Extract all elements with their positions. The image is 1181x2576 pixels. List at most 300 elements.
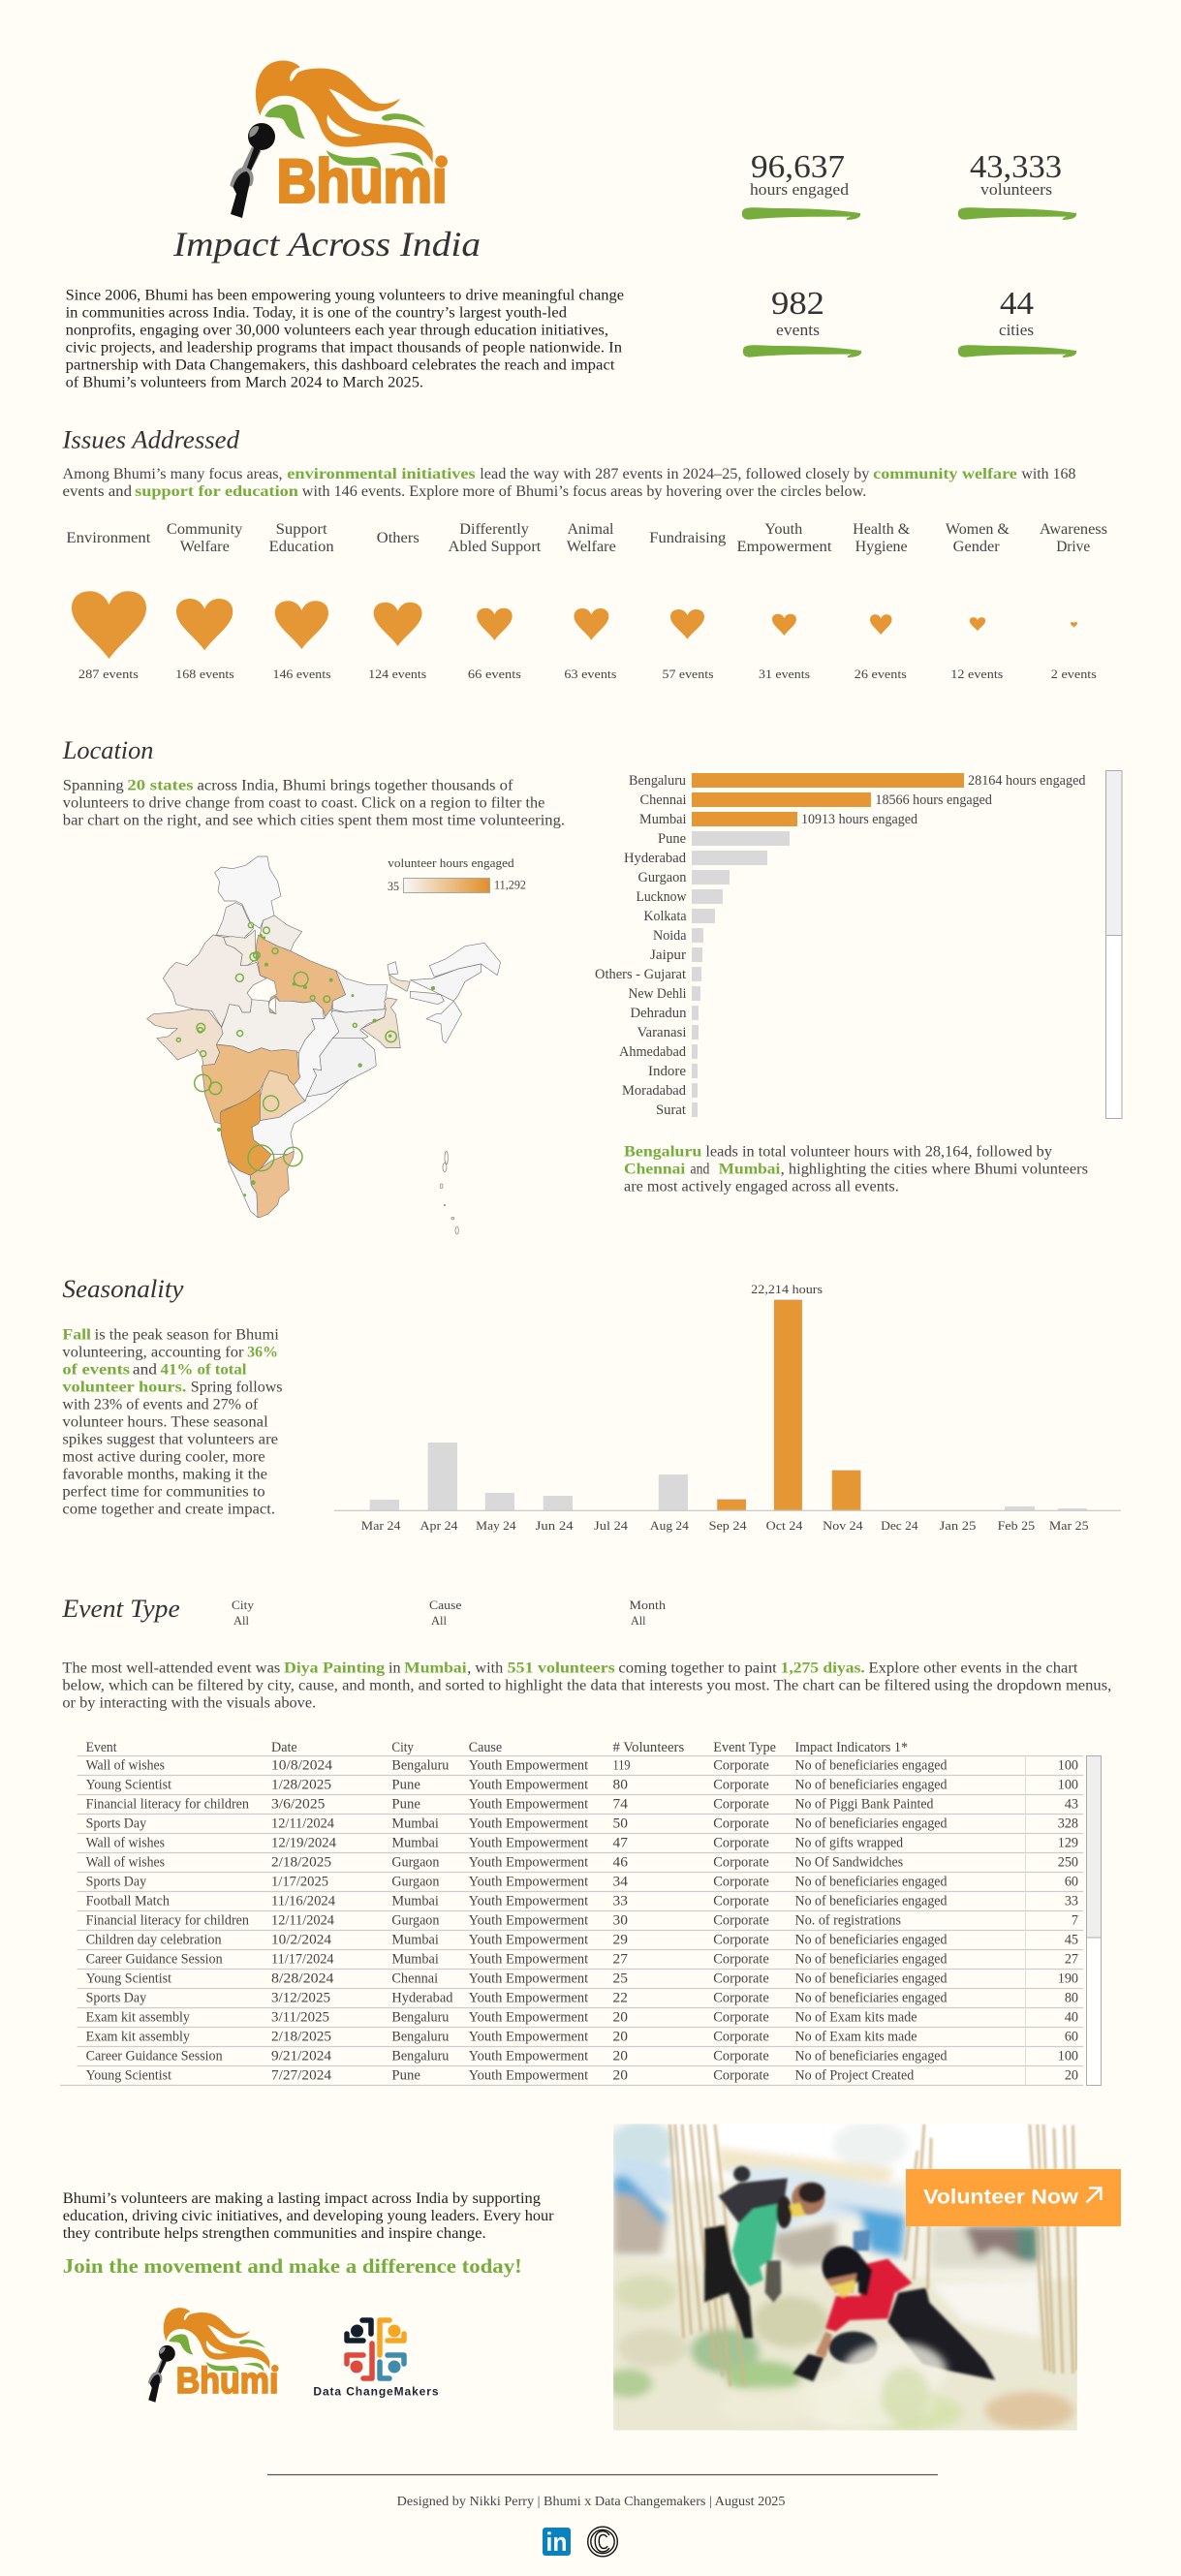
panel: event type (60, 1595, 1111, 2085)
row: Career Guidance Session, Bengaluru: 100 (1058, 2048, 1078, 2064)
row: Career Guidance Session, Mumbai: 27 (1065, 1951, 1078, 1967)
text: event type description: coming together to paint (618, 1660, 778, 1676)
filter: month (630, 1598, 667, 1628)
filter: month: Month (630, 1598, 667, 1612)
text: event type description: in (388, 1660, 401, 1676)
footer credit: Designed by Nikki Perry | Bhumi x Data Changemakers | August 2025 (397, 2495, 785, 2509)
table header: Event Type (713, 1740, 776, 1755)
text: location description: volunteers to drive change from coast to coast. Click on a region to filter the (63, 794, 545, 812)
row: Football Match, Mumbai: 33 (1065, 1893, 1078, 1909)
category: Youth Empowerment (736, 521, 832, 681)
bar: Lucknow (636, 889, 723, 905)
text: event type description: 1,275 diyas. (781, 1660, 865, 1676)
text: event type description: 551 volunteers (508, 1660, 615, 1676)
table: events (60, 1740, 1101, 2085)
row: Young Scientist, Pune July: Youth Empowerment (469, 2067, 588, 2083)
row: Sports Day, Hyderabad: No of beneficiaries engaged (794, 1990, 948, 2005)
title: Impact Across India (172, 225, 481, 264)
row: Young Scientist, Pune July: Young Scientist (86, 2067, 171, 2083)
category: Women & Gender (946, 521, 1010, 681)
row: Financial literacy, Pune: Corporate (713, 1796, 769, 1812)
row: Wall of wishes, Bengaluru: 100 (1058, 1757, 1078, 1773)
text: issues description: community welfare (873, 466, 1017, 482)
row: Wall of wishes, Bengaluru: 10/8/2024 (271, 1757, 332, 1773)
axis labels: months: Jun 24 (536, 1518, 574, 1533)
intro text: nonprofits, engaging over 30,000 volunteers each year through education initiatives, (66, 322, 608, 339)
text: seasonality description: is the peak season for Bhumi (95, 1326, 280, 1343)
row: Financial literacy, Gurgaon: Youth Empowerment (469, 1912, 588, 1928)
row: Football Match, Mumbai: Corporate (713, 1893, 769, 1909)
row: Young Scientist, Chennai: 8/28/2024 (271, 1971, 333, 1986)
row: Sports Day, Gurgaon: Gurgaon (391, 1874, 439, 1889)
row: Wall of wishes, Bengaluru: 119 (612, 1757, 630, 1773)
row: Career Guidance Session, Mumbai: Career Guidance Session (86, 1951, 223, 1967)
row: Financial literacy, Pune: Financial literacy for children (86, 1796, 249, 1812)
bar: Kolkata (643, 909, 715, 924)
text: issues description: with 146 events. Explore more of Bhumi’s focus areas by hovering over the circles below. (302, 483, 866, 500)
category: Differently Abled Support (449, 521, 542, 681)
heading: seasonality: Seasonality (62, 1275, 184, 1303)
text: event type description (62, 1660, 1111, 1711)
row: Financial literacy, Pune: 43 (1065, 1796, 1078, 1812)
row: Wall of wishes, Bengaluru: Bengaluru (391, 1757, 449, 1773)
row: Football Match, Mumbai (86, 1893, 1078, 1909)
photo: volunteers clearing weeds (605, 2119, 1084, 2435)
row: Young Scientist, Pune: 100 (1058, 1777, 1078, 1792)
row: Sports Day, Gurgaon: 1/17/2025 (271, 1874, 328, 1889)
text: event type description: Mumbai (404, 1660, 467, 1676)
axis labels: months: Sep 24 (709, 1518, 747, 1533)
row: Sports Day, Hyderabad: 3/12/2025 (271, 1990, 330, 2005)
category: Community Welfare: Welfare (180, 539, 230, 555)
text: seasonality description: and (133, 1361, 157, 1378)
heading: event type: Event Type (61, 1595, 180, 1623)
icon: LinkedIn: in (546, 2528, 568, 2557)
panel: seasonality (62, 1275, 1121, 1533)
bar: Gurgaon (637, 870, 730, 885)
row: Children day celebration, Mumbai: No of beneficiaries engaged (794, 1932, 948, 1947)
row: Sports Day, Hyderabad (86, 1990, 1078, 2005)
row: Financial literacy, Gurgaon: 7 (1072, 1912, 1078, 1928)
table header: City (391, 1740, 415, 1755)
row: Wall of wishes, Mumbai: Wall of wishes (86, 1835, 165, 1850)
table header (86, 1740, 908, 1755)
row: Financial literacy, Pune (86, 1796, 1078, 1812)
stat: events: 982 (771, 286, 824, 322)
map: India volunteer hours (147, 856, 501, 1234)
row: Wall of wishes, Mumbai: Mumbai (391, 1835, 439, 1850)
row: Wall of wishes, Mumbai: Youth Empowerment (469, 1835, 588, 1850)
row: Career Guidance Session, Mumbai: Corporate (713, 1951, 769, 1967)
text: seasonality description: favorable months, making it the (62, 1466, 267, 1482)
row: Financial literacy, Pune: No of Piggi Bank Painted (794, 1796, 934, 1812)
bar: Mumbai (639, 812, 918, 827)
panel: location (62, 736, 1122, 1234)
category: Health & Hygiene: Hygiene (855, 539, 908, 555)
row: Career Guidance Session, Mumbai: No of beneficiaries engaged (794, 1951, 948, 1967)
axis labels: months: Mar 25 (1049, 1518, 1089, 1533)
row: Wall of wishes, Bengaluru: Youth Empowerment (469, 1757, 588, 1773)
axis labels: months: Jul 24 (594, 1518, 629, 1533)
row: Wall of wishes, Mumbai: 12/19/2024 (271, 1835, 336, 1850)
bar: Hyderabad: Hyderabad (624, 851, 687, 866)
category: Support Education (269, 521, 334, 681)
bar: Hyderabad (624, 851, 767, 866)
text: closing statement: Bhumi’s volunteers are making a lasting impact across India by supporting (63, 2190, 541, 2207)
logo wordmark small: Bhumi (176, 2360, 278, 2401)
text: call to action: Join the movement and make a difference today! (63, 2254, 522, 2278)
row: Career Guidance Session, Bengaluru: Career Guidance Session (86, 2048, 223, 2064)
category: Awareness Drive (1040, 521, 1107, 681)
label: peak month: 22,214 hours (751, 1282, 823, 1296)
row: Young Scientist, Pune: 1/28/2025 (271, 1777, 331, 1792)
filter: month: All (631, 1613, 646, 1628)
row: Wall of wishes, Gurgaon: No Of Sandwidches (794, 1854, 904, 1870)
row: Young Scientist, Pune (86, 1777, 1078, 1792)
intro text: partnership with Data Changemakers, this dashboard celebrates the reach and impact (66, 357, 615, 374)
bar: Ahmedabad: Ahmedabad (619, 1044, 687, 1060)
row: Sports Day, Mumbai: 12/11/2024 (271, 1816, 334, 1831)
text: issues description (62, 466, 1076, 500)
row: Career Guidance Session, Mumbai: Youth Empowerment (469, 1951, 588, 1967)
axis labels: months (361, 1518, 1089, 1533)
intro text: of Bhumi’s volunteers from March 2024 to March 2025. (66, 374, 423, 391)
text: event type description: below, which can be filtered by city, cause, and month, and sorted to highlight the data that interests you most. The chart can be filtered using the dropdown menus, (62, 1677, 1111, 1693)
row: Financial literacy, Gurgaon: 12/11/2024 (271, 1912, 334, 1928)
row: Exam kit assembly, February: Youth Empowerment (469, 2029, 588, 2044)
text: seasonality description: with 23% of events and 27% of (62, 1396, 259, 1412)
category: Differently Abled Support: Abled Support (449, 539, 542, 555)
bar: Noida (653, 928, 703, 944)
category: Awareness Drive: Drive (1056, 539, 1090, 555)
bar: Chennai (639, 792, 993, 808)
text: bar chart takeaway: and (690, 1161, 710, 1178)
text: location description (63, 777, 565, 829)
category: Women & Gender: Women & (946, 521, 1010, 538)
text: bar chart takeaway: leads in total volunteer hours with 28,164, followed by (705, 1143, 1052, 1161)
row: Exam kit assembly, March: Exam kit assembly (86, 2009, 191, 2025)
text: seasonality description: Spring follows (191, 1379, 283, 1395)
bar: Pune: Pune (658, 831, 686, 847)
text: seasonality description: Fall (62, 1326, 92, 1343)
bar: New Dehli: New Dehli (628, 986, 686, 1002)
category: Youth Empowerment: 31 events (759, 667, 810, 681)
axis labels: months: Mar 24 (361, 1518, 401, 1533)
row: Young Scientist, Chennai: Young Scientist (86, 1971, 171, 1986)
row: Sports Day, Mumbai: No of beneficiaries engaged (794, 1816, 948, 1831)
text: closing statement: education, driving civic initiatives, and developing young leaders. Every hour (63, 2208, 554, 2224)
text: bar chart takeaway: are most actively engaged across all events. (624, 1178, 899, 1195)
stat: cities (958, 286, 1076, 357)
row: Young Scientist, Pune July: Pune (391, 2067, 420, 2083)
text: seasonality description: volunteering, accounting for (62, 1344, 244, 1360)
row: Young Scientist, Chennai: 25 (612, 1971, 628, 1986)
text: seasonality description: come together and create impact. (62, 1501, 275, 1517)
intro text (66, 287, 624, 391)
bar: Kolkata: Kolkata (643, 909, 687, 924)
text: location description: bar chart on the right, and see which cities spent them most time volunteering. (63, 812, 565, 829)
row: Exam kit assembly, February: 2/18/2025 (271, 2029, 331, 2044)
axis labels: months: Apr 24 (420, 1518, 458, 1533)
category: Community Welfare: 168 events (175, 667, 234, 681)
row: Football Match, Mumbai: Football Match (86, 1893, 170, 1909)
legend: volunteer hours engaged (388, 855, 526, 893)
row: Football Match, Mumbai: 33 (612, 1893, 628, 1909)
row: Sports Day, Gurgaon: 34 (612, 1874, 628, 1889)
row: Sports Day, Mumbai: Mumbai (391, 1816, 439, 1831)
chart: volunteer hours by city (595, 773, 1086, 1118)
heading: issues addressed: Issues Addressed (61, 426, 240, 453)
text: event type description: , with (467, 1660, 504, 1676)
text: closing statement: they contribute helps strengthen communities and inspire change. (63, 2225, 486, 2242)
row: Sports Day, Hyderabad: Sports Day (86, 1990, 147, 2005)
row: Young Scientist, Chennai: Corporate (713, 1971, 769, 1986)
row: Exam kit assembly, March (86, 2009, 1078, 2025)
row: Young Scientist, Pune: Pune (391, 1777, 420, 1792)
row: Financial literacy, Pune: Youth Empowerment (469, 1796, 588, 1812)
row: Sports Day, Gurgaon: Corporate (713, 1874, 769, 1889)
table grid lines (60, 1755, 1083, 2085)
row: Exam kit assembly, February: No of Exam kits made (794, 2029, 917, 2044)
bar: Bengaluru (629, 773, 1086, 789)
chart: monthly volunteer hours (334, 1282, 1121, 1533)
row: Children day celebration, Mumbai: Children day celebration (86, 1932, 222, 1947)
row: Exam kit assembly, February: Bengaluru (391, 2029, 449, 2044)
row: Young Scientist, Pune July: No of Project Created (794, 2067, 914, 2083)
row: Wall of wishes, Mumbai: Corporate (713, 1835, 769, 1850)
panel: call to action (63, 2119, 1121, 2435)
row: Sports Day, Gurgaon: Sports Day (86, 1874, 147, 1889)
table header: Date (271, 1740, 297, 1755)
axis labels: months: May 24 (476, 1518, 516, 1533)
row: Sports Day, Hyderabad: Corporate (713, 1990, 769, 2005)
row: Financial literacy, Gurgaon (86, 1912, 1078, 1928)
row: Exam kit assembly, February: Corporate (713, 2029, 769, 2044)
row: Young Scientist, Pune July (86, 2067, 1078, 2083)
category: Awareness Drive: Awareness (1040, 521, 1107, 538)
legend: volunteer hours engaged: volunteer hours engaged (388, 855, 514, 870)
row: Young Scientist, Pune: Corporate (713, 1777, 769, 1792)
axis labels: months: Jan 25 (940, 1518, 976, 1533)
filter: cause (429, 1598, 462, 1628)
row: Exam kit assembly, March: 3/11/2025 (271, 2009, 329, 2025)
stat: hours engaged (742, 149, 860, 220)
category: Awareness Drive: 2 events (1051, 667, 1097, 681)
row: Children day celebration, Mumbai: Mumbai (391, 1932, 439, 1947)
bar: Jaipur: Jaipur (650, 947, 686, 963)
text: seasonality description: volunteer hours. These seasonal (62, 1413, 268, 1430)
intro text: in communities across India. Today, it is one of the country’s largest youth-led (66, 304, 567, 322)
row: Financial literacy, Gurgaon: 30 (612, 1912, 628, 1928)
logo: Bhumi small (148, 2308, 279, 2403)
bar: Mumbai: 10913 hours engaged (801, 812, 918, 827)
table header: Event (86, 1740, 117, 1755)
row: Young Scientist, Chennai: No of beneficiaries engaged (794, 1971, 948, 1986)
row: Young Scientist, Pune: 80 (612, 1777, 628, 1792)
bar: Surat: Surat (656, 1102, 686, 1118)
text: issues description: with 168 (1021, 466, 1076, 482)
category: Differently Abled Support: 66 events (468, 667, 521, 681)
row: Sports Day, Mumbai: Sports Day (86, 1816, 147, 1831)
row: Financial literacy, Pune: 3/6/2025 (271, 1796, 325, 1812)
text: issues description: Among Bhumi’s many focus areas, (62, 466, 283, 482)
text: event type description: The most well-attended event was (62, 1660, 280, 1676)
text: location description: 20 states (127, 777, 194, 794)
filter: cause: All (431, 1613, 447, 1628)
stat: cities: cities (999, 321, 1034, 339)
bar: Jaipur (650, 947, 702, 963)
stat: volunteers (958, 149, 1076, 220)
row: Wall of wishes, Mumbai: No of gifts wrapped (794, 1835, 903, 1850)
row: Football Match, Mumbai: Youth Empowerment (469, 1893, 588, 1909)
table header: # Volunteers (612, 1740, 685, 1755)
category: Others (368, 530, 426, 681)
filter: cause: Cause (429, 1598, 462, 1612)
filter: city: City (232, 1598, 255, 1612)
category: Environment: 287 events (78, 667, 139, 681)
row: Sports Day, Mumbai: Corporate (713, 1816, 769, 1831)
heading: location: Location (62, 736, 153, 764)
row: Exam kit assembly, February (86, 2029, 1078, 2044)
category: Animal Welfare: Welfare (567, 539, 616, 555)
bar: Pune (658, 831, 790, 847)
row: Financial literacy, Gurgaon: Gurgaon (391, 1912, 439, 1928)
row: Exam kit assembly, March: 40 (1065, 2009, 1078, 2025)
panel: issues addressed (61, 426, 1107, 681)
stat: volunteers: 43,333 (970, 149, 1062, 185)
row: Financial literacy, Pune: 74 (612, 1796, 628, 1812)
bar: Lucknow: Lucknow (636, 889, 687, 905)
category: Health & Hygiene (853, 521, 910, 681)
text: bar chart takeaway: , highlighting the cities where Bhumi volunteers (781, 1161, 1088, 1178)
text: issues description: events and (62, 483, 132, 500)
row: Career Guidance Session, Bengaluru: Youth Empowerment (469, 2048, 588, 2064)
category: Health & Hygiene: Health & (853, 521, 910, 538)
row: Wall of wishes, Bengaluru: Corporate (713, 1757, 769, 1773)
bar: Chennai: 18566 hours engaged (875, 792, 993, 808)
axis labels: months: Feb 25 (998, 1518, 1035, 1533)
row: Children day celebration, Mumbai: 10/2/2024 (271, 1932, 331, 1947)
text: seasonality description: 41% of total (161, 1361, 247, 1378)
map states (147, 856, 501, 1218)
filter: city (232, 1598, 255, 1628)
row: Financial literacy, Gurgaon: No. of registrations (794, 1912, 901, 1928)
category: Animal Welfare (564, 521, 616, 681)
row: Career Guidance Session, Bengaluru: 20 (612, 2048, 628, 2064)
category: Others: Others (377, 530, 420, 546)
row: Young Scientist, Pune July: 20 (612, 2067, 628, 2083)
button: volunteer now: Volunteer Now (923, 2185, 1078, 2208)
table header: Impact Indicators 1* (794, 1740, 908, 1755)
category: Fundraising: 57 events (663, 667, 713, 681)
row: Young Scientist, Chennai: Chennai (391, 1971, 438, 1986)
category: Animal Welfare: 63 events (564, 667, 616, 681)
bar: Indore: Indore (648, 1064, 686, 1079)
row: Young Scientist, Chennai (86, 1971, 1078, 1986)
row: Young Scientist, Chennai: Youth Empowerment (469, 1971, 588, 1986)
axis labels: months: Dec 24 (881, 1518, 918, 1533)
row: Wall of wishes, Gurgaon: Gurgaon (391, 1854, 439, 1870)
legend: volunteer hours engaged: 11,292 (494, 878, 526, 891)
scrollbar: bar chart (1106, 771, 1122, 1118)
row: Exam kit assembly, March: Corporate (713, 2009, 769, 2025)
intro text: civic projects, and leadership programs that impact thousands of people nationwide. In (66, 339, 622, 357)
map islands (440, 1151, 458, 1234)
row: Career Guidance Session, Bengaluru: Bengaluru (391, 2048, 449, 2064)
logo: Bhumi (230, 60, 449, 218)
text: seasonality description: spikes suggest that volunteers are (62, 1431, 278, 1447)
text: seasonality description (62, 1326, 283, 1517)
category: Youth Empowerment: Empowerment (736, 539, 832, 555)
text: seasonality description: most active during cooler, more (62, 1448, 265, 1465)
row: Career Guidance Session, Mumbai: 27 (612, 1951, 628, 1967)
category: Support Education: 146 events (273, 667, 331, 681)
row: Young Scientist, Pune July: Corporate (713, 2067, 769, 2083)
row: Career Guidance Session, Bengaluru: No of beneficiaries engaged (794, 2048, 948, 2064)
text: bar chart takeaway: Mumbai (719, 1161, 781, 1178)
row: Children day celebration, Mumbai: Youth Empowerment (469, 1932, 588, 1947)
category: Fundraising: Fundraising (649, 530, 727, 546)
row: Exam kit assembly, February: 60 (1065, 2029, 1078, 2044)
text: location description: across India, Bhumi brings together thousands of (198, 777, 513, 794)
row: Wall of wishes, Gurgaon: 46 (612, 1854, 628, 1870)
row: Sports Day, Gurgaon: No of beneficiaries engaged (794, 1874, 948, 1889)
bar: Others - Gujarat: Others - Gujarat (595, 967, 686, 982)
stat: volunteers: volunteers (980, 180, 1052, 199)
row: Sports Day, Hyderabad: Youth Empowerment (469, 1990, 588, 2005)
intro text: Since 2006, Bhumi has been empowering young volunteers to drive meaningful change (66, 287, 624, 304)
row: Sports Day, Mumbai (86, 1816, 1078, 1831)
button: volunteer now (906, 2169, 1121, 2226)
category: Differently Abled Support: Differently (459, 521, 529, 538)
row: Career Guidance Session, Mumbai: Mumbai (391, 1951, 439, 1967)
row: Sports Day, Gurgaon (86, 1874, 1078, 1889)
category: Support Education: Education (269, 539, 334, 555)
row: Football Match, Mumbai: Mumbai (391, 1893, 439, 1909)
axis labels: months: Oct 24 (766, 1518, 803, 1533)
text: bar chart takeaway: Chennai (624, 1161, 686, 1178)
logo wordmark: Data ChangeMakers: Data ChangeMakers (313, 2385, 439, 2399)
text: issues description: lead the way with 287 events in 2024–25, followed closely by (480, 466, 870, 482)
row: Career Guidance Session, Bengaluru: 9/21/2024 (271, 2048, 331, 2064)
category: Animal Welfare: Animal (568, 521, 614, 538)
row: Sports Day, Hyderabad: 22 (612, 1990, 628, 2005)
row: Exam kit assembly, March: 20 (612, 2009, 628, 2025)
row: Career Guidance Session, Bengaluru (86, 2048, 1078, 2064)
text: closing statement (63, 2190, 554, 2242)
filter: city: All (233, 1613, 249, 1628)
row: Sports Day, Hyderabad: Hyderabad (391, 1990, 452, 2005)
row: Children day celebration, Mumbai: Corporate (713, 1932, 769, 1947)
row: Wall of wishes, Bengaluru: Wall of wishes (86, 1757, 165, 1773)
row: Wall of wishes, Gurgaon: 250 (1058, 1854, 1078, 1870)
text: issues description: environmental initiatives (287, 466, 476, 482)
text: event type description: Diya Painting (284, 1660, 385, 1676)
logo wordmark: Bhumi (277, 148, 448, 216)
scrollbar: table (1087, 1755, 1101, 2085)
bar: Bengaluru: 28164 hours engaged (968, 773, 1086, 789)
row: Football Match, Mumbai: 11/16/2024 (271, 1893, 335, 1909)
category: Youth Empowerment: Youth (764, 521, 803, 538)
stat: hours engaged: 96,637 (751, 149, 845, 185)
row: Exam kit assembly, March: Bengaluru (391, 2009, 449, 2025)
category: Environment (66, 530, 151, 681)
bar: Mumbai: Mumbai (639, 812, 686, 827)
row: Wall of wishes, Bengaluru (86, 1757, 1078, 1773)
row: Wall of wishes, Mumbai (86, 1835, 1078, 1850)
row: Exam kit assembly, February: Exam kit assembly (86, 2029, 191, 2044)
row: Wall of wishes, Gurgaon: Wall of wishes (86, 1854, 165, 1870)
